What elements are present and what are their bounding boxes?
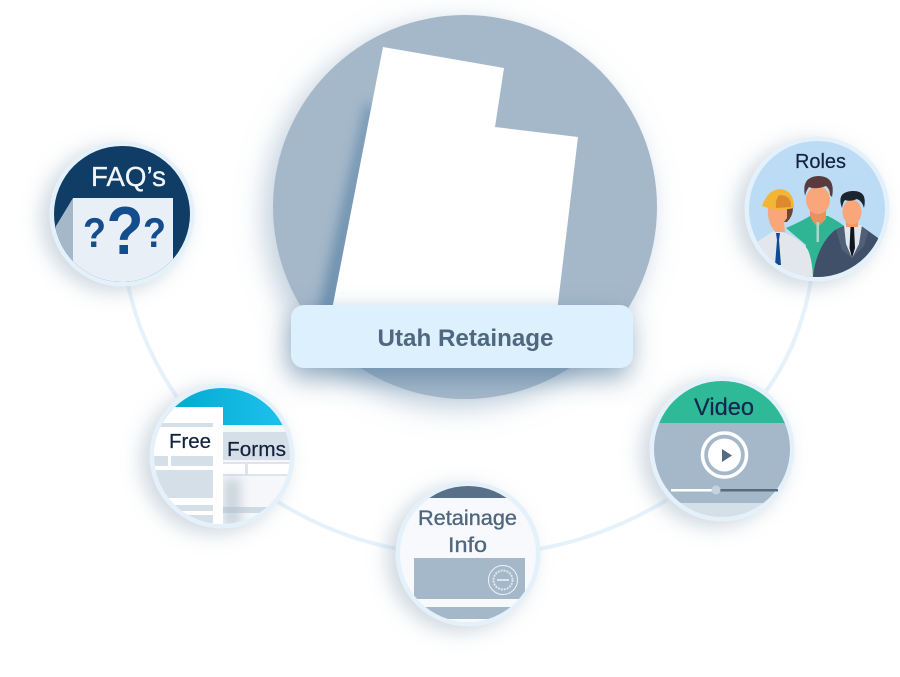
node: Free Forms: Forms	[227, 439, 286, 461]
question marks	[84, 206, 164, 254]
node: Video: Video	[694, 394, 754, 421]
heading: FAQ's: FAQ’s	[91, 161, 166, 192]
person: left, hard hat	[757, 189, 813, 282]
icon: stamp seal	[488, 566, 518, 594]
node: Retainage Info	[396, 482, 540, 627]
node: FAQ's	[50, 140, 194, 290]
front form page	[150, 407, 223, 527]
node: Free Forms: Free	[169, 431, 211, 453]
node: Retainage Info: Info	[448, 534, 487, 557]
question marks: ?	[83, 209, 106, 256]
central circle with Utah map	[273, 15, 657, 399]
video progress bar	[671, 486, 778, 494]
person: right, dark suit	[813, 191, 882, 282]
title label: Utah Retainage: Utah Retainage	[378, 325, 554, 352]
node: Roles: Roles	[795, 151, 846, 173]
question marks: ?	[143, 209, 166, 256]
title label: Utah Retainage	[291, 305, 633, 368]
node: Retainage Info: Retainage	[418, 507, 517, 530]
node: Roles	[745, 137, 890, 282]
back form page	[223, 425, 293, 528]
Utah state silhouette	[330, 47, 578, 320]
icon: play button	[702, 433, 746, 477]
node: Video	[650, 378, 795, 523]
node: Free Forms	[150, 385, 294, 528]
connector arcs	[128, 280, 811, 549]
question marks: ?	[106, 193, 144, 269]
person: centre, green shirt	[786, 176, 844, 277]
